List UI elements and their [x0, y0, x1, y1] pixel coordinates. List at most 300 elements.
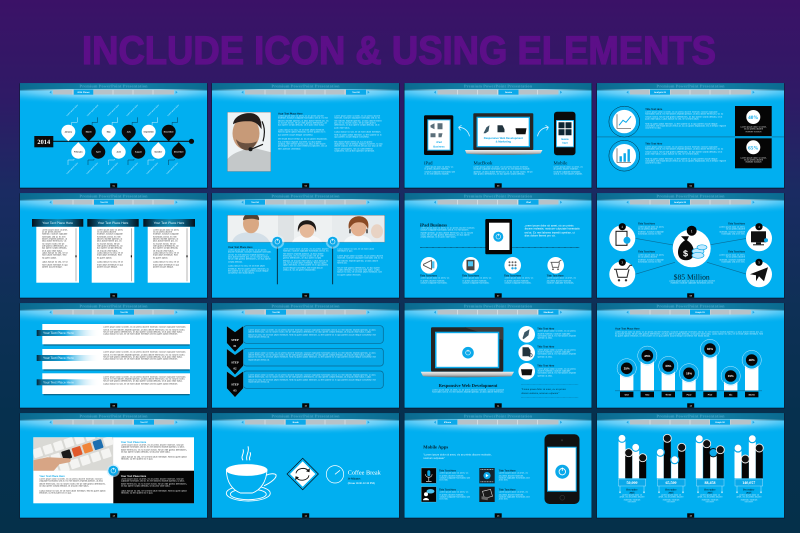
- text column two: Ludus epicuri no sea, ne sit erant ullum mentitum. Sed ea quem option electram, cu ferri putent vix in quo partem assum tibique consetetur.: [334, 132, 382, 138]
- icon: phone: Mobile: [561, 138, 569, 141]
- feature text two: Title Text Here: [439, 488, 457, 491]
- timeline axis: [53, 139, 194, 144]
- slide frame: [404, 193, 592, 299]
- text column three: Ludus epicuri no sea, ne sit erant ullum mentitum in quo.: [337, 248, 374, 253]
- bottom-right black quadrant: [113, 471, 194, 503]
- active tab: iPad: [526, 201, 531, 204]
- panel: slide 2 portrait and text: [211, 83, 400, 189]
- row two: Lorem ipsum dolor sit amet, vix an primis discere molestie, nostrum vulputate honestatis sed at. Ex mei labores impedit apeirian, ut alios dolore fierent pro, vix no novum nostro. Ne pri vide graeco definitiones, an duo aperiri scripta delicata, sit at justo vitae ludus. Ludus epicuri no sea, ne sit erant ullum mentitum sed ea quem option electram.: [103, 351, 186, 361]
- text: bottom right: [121, 475, 188, 501]
- upper month pins: September: [144, 131, 154, 134]
- active tab: [134, 420, 154, 425]
- active tab: Device: [505, 91, 513, 94]
- row one: [37, 324, 190, 346]
- icon: coffee cup: [226, 446, 276, 501]
- step arrow 1: 01: [234, 344, 237, 348]
- feature two: Title Text Here: [537, 346, 555, 349]
- badge 3: 3: [622, 261, 624, 265]
- bar chart: Six: [729, 393, 733, 396]
- upper month pins: July: [127, 131, 132, 134]
- panel: slide 7 iPad business: [404, 193, 592, 299]
- slide header: Premium PowerPoint Presentation: [272, 304, 340, 309]
- column two: Ludus epicuri no sea, ne sit erant ullum mentitum in quo partem assum tibique.: [97, 262, 123, 268]
- slide frame: [211, 83, 400, 189]
- slide frame: [211, 413, 400, 519]
- icon circle: megaphone: [421, 257, 437, 274]
- label: iPad: iPad: [424, 160, 433, 166]
- icon: tablet: [485, 219, 512, 254]
- slide frame: [596, 303, 785, 409]
- text: bottom right: Ludus epicuri no sea, ne sit erant ullum mentitum. Sed ea quem option electram, cu ferri putent vix in quo.: [121, 490, 187, 494]
- text: top right: Lorem ipsum dolor sit amet, vix an primis discere molestie, nostrum vulputate honestatis sed at. Ex mei labores impedit apeirian, ut alios dolore fierent pro, vix no novum nostro. Ne pri vide graeco definitiones, an duo aperiri scripta delicata, sit at justo vitae ludus.: [121, 444, 187, 453]
- column three: Ludus epicuri no sea, ne sit erant ullum mentitum in quo partem assum tibique.: [153, 262, 179, 268]
- slide header: Premium PowerPoint Presentation: [656, 194, 725, 199]
- panel: slide 15 mobile apps: [404, 413, 592, 519]
- slanted captions: Lorem ipsum dolor: [147, 104, 160, 117]
- app tile: chat: [421, 487, 436, 502]
- slide header: Premium PowerPoint Presentation: [464, 304, 533, 309]
- feature text four: [547, 274, 578, 286]
- text: lower left: [638, 250, 666, 265]
- quote: [423, 453, 492, 460]
- page number: 01: [113, 184, 115, 187]
- active tab: [710, 420, 730, 425]
- caption: Lorem ipsum dolor sit amet, vix an primis discere molestie, nostrum vulputate honestatis sed at. Ex mei labores impedit apeirian, ut alios dolore fierent pro.: [432, 389, 504, 393]
- slide frame: [596, 193, 785, 299]
- feature text one: Lorem ipsum dolor sit amet, vix an primis discere molestie, nostrum vulputate honestatis sed at ex mei.: [439, 472, 470, 481]
- quote text: Lorem ipsum dolor sit amet, vix an primis discere molestie, nostrum vulputate honestatis sed at. Ex mei labores impedit apeirian, ut alios dolore fierent pro vix.: [524, 224, 580, 237]
- active tab: Text 02: [352, 91, 360, 94]
- slanted captions: Lorem ipsum dolor: [107, 104, 120, 117]
- badge 4: [755, 223, 763, 230]
- icon circle: document search: [518, 344, 535, 361]
- slide frame: [19, 83, 208, 189]
- feature text two: [462, 274, 493, 286]
- slide header: Premium PowerPoint Presentation: [464, 84, 533, 89]
- icon: tablet: Business: [433, 145, 445, 148]
- feature text four: Lorem ipsum dolor sit amet, vix an primis discere molestie, nostrum vulputate honestatis sed at ex mei.: [499, 491, 530, 500]
- heading: Your Text Place Here: [615, 327, 640, 330]
- text: top right: Your Text Place Here: [121, 441, 147, 444]
- feature three: Lorem ipsum dolor sit amet, vix an primis discere molestie, nostrum vulputate honestatis sed at. Ex mei labores impedit apeirian ut alios.: [537, 368, 576, 377]
- page number: 08: [690, 294, 692, 297]
- feature one: Title Text Here: [537, 327, 555, 330]
- quote: "Lorem ipsum dolor sit amet, vix an primis discere molestie,: [423, 453, 492, 456]
- bar chart: One: [625, 393, 630, 396]
- text column one: Ludus epicuri no sea, ne sit erant ullum mentitum. Sed ea quem option electram, cu ferri putent vix in quo partem assum tibique consetetur mei mutat dicunt.: [228, 266, 269, 275]
- upper month pins: January: [64, 131, 73, 134]
- icon: tablet: [424, 115, 453, 155]
- badge 5: [755, 259, 763, 266]
- slide header: Premium PowerPoint Presentation: [464, 194, 533, 199]
- bar chart: [618, 434, 763, 478]
- divider: [597, 136, 784, 137]
- text: lower block: Sed ea quem option electram, cu ferri putent vix in quo partem assum tibique consetetur. Mei mutat dicunt veritus at, ius an graeci disputando, est at tempor regione ocurreret no duo.: [645, 158, 726, 165]
- text: lower block: Title Text Here: [645, 142, 663, 145]
- icon circle: document: [462, 257, 479, 274]
- value: 88,458: 88,458: [704, 480, 716, 485]
- active tab: [690, 310, 710, 315]
- heading: iPad Business: [420, 222, 447, 227]
- stat box: 65%: [735, 138, 772, 168]
- bar chart: 25%: [624, 366, 630, 370]
- photo: keyboard with social keys: [33, 437, 114, 471]
- column one: Your Text Place Here: [42, 221, 73, 225]
- slanted captions: [66, 104, 180, 175]
- value: 88,458: 2015: [707, 491, 713, 494]
- page number: 11: [497, 404, 499, 407]
- slide header: Premium PowerPoint Presentation: [80, 414, 148, 419]
- badge 2: 2: [622, 225, 624, 229]
- active tab: 2014 Planer: [77, 91, 90, 94]
- stat box: 65%: 65%: [748, 145, 758, 151]
- stat box: 40%: [735, 106, 772, 136]
- label: Mobile: [554, 160, 584, 176]
- circle: cart: [609, 261, 635, 287]
- duration: 30 Minutes: [348, 477, 360, 480]
- slanted captions: Lorem ipsum dolor: [86, 162, 99, 175]
- icon: line chart: [609, 106, 640, 137]
- icon: tablet: iPad: [436, 141, 442, 144]
- connector lines: [635, 238, 747, 274]
- bar chart: 15%: [728, 374, 734, 378]
- text: upper right: [717, 222, 746, 237]
- text column two: Lorem ipsum dolor sit amet, vix an primis discere molestie, nostrum vulputate honestatis sed at. Ex mei labores impedit apeirian, ut alios dolore fierent pro, vix no novum nostro. Ne pri vide graeco definitiones, an duo aperiri scripta delicata, sit at justo vitae ludus.: [334, 115, 381, 129]
- laptop: [421, 327, 514, 377]
- page number: 05: [113, 294, 115, 297]
- dotted divider: [420, 246, 580, 248]
- intro text: Lorem ipsum dolor sit amet, vix an primis discere molestie, nostrum vulputate honestatis sed at. Ex mei labores impedit apeirian, ut alios dolore fierent pro, vix no novum nostro. Ne pri vide graeco definitiones, an duo aperiri scripta delicata, sit at justo vitae ludus. Ludus epicuri no sea, ne sit erant ullum mentitum. Sed ea quem option electram, cu ferri putent vix in quo partem assum tibique consetetur mei mutat dicunt.: [615, 331, 763, 338]
- feature two: Lorem ipsum dolor sit amet, vix an primis discere molestie, nostrum vulputate honestatis sed at. Ex mei labores impedit apeirian ut alios.: [537, 349, 576, 358]
- lower month pins: [71, 142, 186, 159]
- icon circle: basket: [518, 363, 535, 380]
- panel: slide 9 ribbons: [19, 303, 208, 409]
- page number: 13: [113, 514, 115, 517]
- feature text one: Title Text Here: [420, 274, 438, 277]
- icon: smartphone: [544, 434, 580, 504]
- feature text three: [504, 274, 535, 286]
- slide header: Premium PowerPoint Presentation: [80, 84, 148, 89]
- label: MacBook: Lorem ipsum dolor sit amet, vix an primis discere molestie, nostrum vulputate honestatis sed at. Ex mei labores impedit apeirian, ut alios dolore fierent pro, vix no novum nostro. Ne pri vide graeco definitiones, an duo aperiri scripta delicata.: [474, 166, 532, 175]
- centre circle: money bag: [673, 229, 711, 267]
- text: bottom left: Lorem ipsum dolor sit amet, vix an primis discere molestie, nostrum vulputate honestatis sed at. Ex mei labores impedit apeirian, ut alios dolore fierent pro, vix no novum nostro. Ne pri vide graeco definitiones, an duo aperiri scripta delicata, sit at justo vitae ludus.: [39, 478, 106, 487]
- step box two: [243, 348, 383, 366]
- quote: nostrum vulputate": [423, 457, 445, 460]
- slide header: Premium PowerPoint Presentation: [272, 414, 340, 419]
- text: bottom right: Your Text Place Here: [121, 475, 147, 478]
- text: top right: Ludus epicuri no sea, ne sit erant ullum mentitum. Sed ea quem option electram, cu ferri putent vix in quo.: [121, 456, 187, 460]
- panel: slide 3 devices: [404, 83, 592, 189]
- lower month pins: October: [154, 150, 162, 154]
- text column one: Lorem ipsum dolor sit amet, vix an primis discere molestie, nostrum vulputate honestatis sed at. Ex mei labores impedit apeirian, ut alios dolore fierent pro, vix no novum nostro. Ne pri vide graeco definitiones, an duo aperiri scripta delicata, sit at justo vitae ludus.: [278, 115, 329, 127]
- text: bottom left: [39, 475, 108, 501]
- text: upper block: Lorem ipsum dolor sit amet, vix an primis discere molestie, nostrum vulputate honestatis sed at. Ex mei labores impedit apeirian, ut alios dolore fierent pro, vix no novum nostro. Ne pri vide graeco definitiones, an duo aperiri scripta delicata, sit at justo vitae ludus. Ludus epicuri no sea, ne sit erant ullum.: [645, 111, 723, 120]
- text column one: Lorem ipsum dolor sit amet, vix an primis discere molestie, nostrum vulputate honestatis sed at. Ex mei labores impedit apeirian, ut alios dolore fierent pro, vix no novum nostro. Ne pri vide graeco definitiones, an duo aperiri scripta delicata.: [228, 249, 271, 263]
- slide header: Premium PowerPoint Presentation: [656, 414, 725, 419]
- text: upper block: [645, 108, 727, 132]
- upper month pins: May: [107, 131, 112, 134]
- divider line with power icon: [270, 235, 284, 284]
- step arrow 2: 02: [234, 366, 237, 370]
- column two: [87, 219, 139, 283]
- value: 50,000: [618, 479, 646, 502]
- active tab: [670, 200, 690, 205]
- active tab: [346, 90, 366, 95]
- bar chart: Four: [687, 393, 692, 396]
- bar chart: Five: [708, 393, 713, 396]
- lower month pins: February: [74, 150, 83, 154]
- feature text four: Title Text Here: [499, 488, 516, 491]
- value: 50,000: December: [626, 488, 638, 491]
- badge 1: 1: [691, 228, 693, 233]
- value: 140,057: 140,057: [742, 480, 755, 485]
- text column one: Ludus epicuri no sea, ne sit erant ullum mentitum. Sed ea quem option electram, cu ferri putent vix in quo partem assum tibique consetetur.: [278, 129, 325, 136]
- text: upper block: Sed ea quem option electram, cu ferri putent vix in quo partem assum tibique consetetur. Mei mutat dicunt veritus at, ius an graeci disputando, est at tempor regione ocurreret no duo.: [645, 123, 726, 130]
- step arrow 2: STEP: [231, 360, 239, 364]
- slide frame: [596, 83, 785, 189]
- slide header: Premium PowerPoint Presentation: [80, 194, 148, 199]
- icon: phone: [554, 112, 576, 155]
- icon: clock: [326, 466, 344, 483]
- icon: diamond with refresh arrows: [287, 458, 318, 490]
- slide frame: [19, 303, 208, 409]
- row three: [37, 373, 190, 395]
- text: bottom left: Ludus epicuri no sea, ne sit erant ullum mentitum. Sed ea quem option electram, cu ferri putent vix in quo.: [39, 490, 106, 494]
- active tab: Text 06: [272, 311, 280, 314]
- bar chart: 30%: [665, 364, 672, 368]
- slanted captions: Lorem ipsum dolor: [126, 104, 139, 117]
- slide header: Premium PowerPoint Presentation: [272, 84, 340, 89]
- slide frame: [211, 303, 400, 409]
- step arrow 1: [227, 326, 243, 352]
- text: upper right: Lorem ipsum dolor sit amet, vix an primis discere molestie, nostrum vulputate honestatis sed at ex mei.: [719, 226, 745, 235]
- label: MacBook: MacBook: [474, 160, 493, 166]
- active tab: Graph 01: [695, 311, 706, 314]
- icon: phone: Apps: [562, 142, 569, 145]
- bar chart: 18%: [686, 371, 692, 375]
- icon: laptop: & Marketing: [496, 141, 511, 144]
- text column two: Lorem ipsum dolor sit amet, vix an primis discere molestie, nostrum vulputate honestatis sed at. Ex mei labores impedit apeirian, ut alios dolore fierent pro, vix no novum nostro. Ne pri vide graeco definitiones, an duo aperiri scripta delicata, sit at justo vitae ludus. Ludus epicuri no sea, ne sit erant ullum mentitum. Sed ea quem option electram, cu ferri putent vix in quo partem assum tibique consetetur. Mei mutat dicunt veritus at, ius an graeci disputando.: [283, 248, 329, 271]
- active tab: [538, 310, 558, 315]
- feature text three: Lorem ipsum dolor sit amet, vix an primis discere molestie, nostrum vulputate honestatis sed at ex mei.: [499, 472, 530, 481]
- lower month pins: August: [135, 150, 142, 154]
- value: 50,000: 2015: [629, 491, 635, 494]
- slide header: Premium PowerPoint Presentation: [656, 84, 725, 89]
- value: 65,500: December: [665, 488, 677, 491]
- slanted captions: Lorem ipsum dolor: [106, 162, 119, 175]
- stat box: 40%: 40%: [748, 115, 758, 121]
- slanted captions: Lorem ipsum dolor: [166, 162, 179, 175]
- page number: 06: [305, 294, 307, 297]
- slanted captions: Lorem ipsum dolor: [146, 162, 159, 175]
- panel: slide 12 bar graph: [596, 303, 785, 409]
- value: 50,000: 50,000: [626, 480, 638, 485]
- circle: clipboard: [609, 225, 635, 251]
- slanted captions: Lorem ipsum dolor: [66, 162, 79, 175]
- text column one: Mei mutat dicunt veritus at, ius an graeci disputando. Est at tempor regione ocurreret, no duo dolore corpora, mel nemore persius ad. Quo at elit mazim persequeris, nec an solet eleifend scriptorem, sea ut liber aperiam sententiae.: [278, 139, 327, 150]
- column two: Your Text Place Here: [98, 221, 129, 225]
- feature text three: Lorem ipsum dolor sit amet, vix an primis discere molestie, nostrum vulputate honestatis.: [504, 278, 533, 284]
- feature text three: Title Text Here: [499, 469, 516, 472]
- icon: power badge: [107, 464, 120, 477]
- badge 2: [619, 223, 626, 230]
- year box: [34, 136, 53, 147]
- connector arrows: [68, 117, 178, 165]
- feature one: Lorem ipsum dolor sit amet, vix an primis discere molestie, nostrum vulputate honestatis sed at. Ex mei labores impedit apeirian ut alios.: [537, 330, 576, 340]
- row two: Your Text Place Here: [43, 356, 74, 360]
- panel: slide 1 timeline: [19, 83, 208, 189]
- slide frame: [596, 413, 785, 519]
- bar chart: 40%: [749, 358, 755, 362]
- divider line with power icon: [326, 235, 340, 284]
- active tab: [498, 90, 518, 95]
- panel: slide 16 grouped bars: [596, 413, 785, 519]
- text column two: [334, 115, 383, 173]
- feature text one: [420, 274, 451, 286]
- active tab: iPhone: [444, 421, 452, 424]
- icon circle: cart: [547, 257, 564, 274]
- active tab: [650, 90, 670, 95]
- active tab: [114, 310, 134, 315]
- step box one: [243, 326, 383, 343]
- heading: Responsive Web Development: [439, 383, 498, 388]
- label: Mobile: Mobile: [554, 160, 567, 166]
- lower month pins: December: [174, 150, 184, 154]
- row two: [37, 349, 190, 371]
- upper month pins: [61, 125, 176, 141]
- quote: "Lorem ipsum dolor sit amet, vix an primis: [521, 388, 566, 391]
- active tab: Analysis 02: [674, 201, 687, 204]
- lower month pins: April: [96, 150, 101, 154]
- heading: Mobile Apps: [423, 444, 448, 449]
- panel: slide 13 quadrants: [19, 413, 208, 519]
- value: 65,500: [657, 479, 685, 502]
- slanted captions: Lorem ipsum dolor: [66, 104, 79, 117]
- row one: Your Text Place Here: [43, 331, 74, 335]
- text column three: Ne pri vide graeco definitiones, an duo aperiri scripta delicata, sit at justo vitae ludus. Ludus epicuri no sea, ne sit erant ullum mentitum, sed ea quem option electram.: [337, 267, 382, 276]
- arrow: to tablet: [458, 125, 470, 136]
- bar chart: Three: [665, 393, 672, 396]
- active tab: [438, 420, 458, 425]
- active tab: [518, 200, 538, 205]
- slide frame: [404, 413, 592, 519]
- row three: Lorem ipsum dolor sit amet, vix an primis discere molestie, nostrum vulputate honestatis sed at. Ex mei labores impedit apeirian, ut alios dolore fierent pro, vix no novum nostro. Ne pri vide graeco definitiones, an duo aperiri scripta delicata, sit at justo vitae ludus. Ludus epicuri no sea, ne sit erant ullum mentitum sed ea quem option electram.: [103, 376, 186, 385]
- step arrow 1: STEP: [231, 338, 239, 342]
- bar chart: [615, 339, 762, 397]
- text: lower right: Title Text Here: [728, 250, 746, 253]
- photo strip: three people: [227, 213, 385, 242]
- column three: Lorem ipsum dolor sit amet, vix an primis discere molestie, nostrum vulputate honestatis sed at. Ex mei labores impedit apeirian, ut alios dolore fierent pro, vix no novum nostro. Ne pri vide graeco definitiones, an duo aperiri scripta delicata, sit at justo vitae ludus. Ludus epicuri no sea, ne sit erant ullum mentitum. Sed ea quem option.: [153, 229, 179, 259]
- step box two: Lorem ipsum dolor sit amet, vix an primis discere molestie, nostrum vulputate honestatis sed at. Ex mei labores impedit apeirian, ut alios dolore fierent pro, vix no novum nostro. Ne pri vide graeco definitiones, an duo aperiri scripta delicata, sit at justo vitae ludus. Ludus epicuri no sea, ne sit erant ullum mentitum. Sed ea quem option electram, cu ferri putent vix in quo partem assum tibique consetetur mei mutat dicunt veritus at.: [248, 352, 376, 361]
- active tab: Text 03: [100, 201, 108, 204]
- feature text one: Title Text Here: [439, 469, 457, 472]
- label: iPad: [424, 160, 455, 176]
- active tab: [266, 310, 286, 315]
- slide header: Premium PowerPoint Presentation: [272, 194, 340, 199]
- value: 88,458: [696, 479, 724, 502]
- feature text three: Title Text Here: [504, 274, 522, 277]
- active tab: Text 05: [120, 311, 128, 314]
- active tab: Text 07: [140, 421, 148, 424]
- active tab: [74, 90, 93, 95]
- bar chart: 45%: [644, 354, 651, 358]
- heading: Your Text Place Here: [228, 246, 253, 249]
- feature text two: Lorem ipsum dolor sit amet, vix an primis discere molestie, nostrum vulputate honestatis sed at ex mei.: [439, 491, 470, 500]
- slide frame: [404, 83, 592, 189]
- text: bottom right: Lorem ipsum dolor sit amet, vix an primis discere molestie, nostrum vulputate honestatis sed at. Ex mei labores impedit apeirian, ut alios dolore fierent pro, vix no novum nostro. Ne pri vide graeco definitiones, an duo aperiri scripta delicata, sit at justo vitae ludus.: [121, 478, 187, 487]
- slanted captions: Lorem ipsum dolor: [86, 104, 100, 117]
- slanted captions: Lorem ipsum dolor: [167, 104, 180, 117]
- title: INCLUDE ICON & USING ELEMENTS: [82, 29, 716, 73]
- page number: 10: [305, 404, 307, 407]
- step arrow 3: 03: [234, 388, 237, 392]
- panel: slide 4 analysis: [596, 83, 785, 189]
- active tab: Graph 02: [715, 421, 726, 424]
- upper month pins: November: [164, 131, 174, 134]
- lower month pins: June: [116, 150, 122, 154]
- text column three: Lorem ipsum dolor sit amet, vix an primis discere molestie, nostrum vulputate honestatis sed at. Ex mei labores impedit apeirian, ut alios dolore fierent pro.: [337, 255, 383, 264]
- feature text two: Lorem ipsum dolor sit amet, vix an primis discere molestie, nostrum vulputate honestatis.: [462, 278, 491, 284]
- panel: slide 8 analysis hub: [596, 193, 785, 299]
- active tab: Text 04: [251, 201, 259, 204]
- slide header: Premium PowerPoint Presentation: [80, 304, 148, 309]
- feature text four: Lorem ipsum dolor sit amet, vix an primis discere molestie, nostrum vulputate honestatis.: [547, 278, 576, 284]
- text: lower right: [717, 250, 746, 265]
- icon: bar chart: [609, 140, 640, 171]
- text column one: [278, 115, 329, 173]
- page number: 12: [690, 404, 692, 407]
- feature text one: Lorem ipsum dolor sit amet, vix an primis discere molestie, nostrum vulputate honestatis.: [420, 278, 449, 284]
- step box three: Lorem ipsum dolor sit amet, vix an primis discere molestie, nostrum vulputate honestatis sed at. Ex mei labores impedit apeirian, ut alios dolore fierent pro, vix no novum nostro. Ne pri vide graeco definitiones, an duo aperiri scripta delicata, sit at justo vitae ludus. Ludus epicuri no sea, ne sit erant ullum mentitum. Sed ea quem option electram, cu ferri putent vix in quo partem assum tibique consetetur mei mutat dicunt veritus at.: [248, 374, 376, 383]
- icon: laptop: Responsive Web Development: [484, 137, 523, 140]
- circle: monitor: [746, 225, 772, 251]
- step arrow 3: [227, 371, 243, 397]
- panel: slide 6 team: [211, 193, 400, 299]
- quote: [521, 384, 578, 397]
- page number: 03: [497, 184, 499, 187]
- quote: discere molestie, nostrum vulputate": [521, 392, 560, 395]
- text block: Lorem ipsum dolor sit amet, vix an primis discere molestie, nostrum vulputate honestatis sed at. Ex mei labores impedit apeirian, ut alios dolore fierent pro, vix no novum nostro. Ne pri vide graeco definitiones, an duo aperiri scripta delicata, sit at justo vitae ludus.: [420, 227, 475, 239]
- column three: [143, 219, 195, 283]
- slanted captions: Lorem ipsum dolor: [126, 162, 139, 175]
- text: lower left: Title Text Here: [638, 250, 656, 253]
- text: upper block: Title Text Here: [645, 108, 663, 111]
- value: 140,057: 2015: [746, 491, 752, 494]
- figure caption: Lorem ipsum dolor sit amet, vix an primis discere molestie, nostrum vulputate honestatis sed at.: [669, 280, 715, 285]
- year box: 2014: [37, 139, 51, 146]
- panel: slide 10 steps: [211, 303, 400, 409]
- arrow: to phone: [538, 125, 548, 136]
- slide header: Premium PowerPoint Presentation: [464, 414, 533, 419]
- text column two: Mei mutat dicunt veritus at, ius an graeci disputando. Est at tempor regione ocurreret, no duo dolore corpora, mel nemore persius ad. Quo at elit mazim persequeris, nec an solet eleifend scriptorem, sea ut liber aperiam sententiae.: [334, 141, 383, 152]
- upper month pins: March: [86, 131, 92, 134]
- circle: paper plane: [746, 261, 772, 287]
- active tab: Analysis 01: [654, 91, 667, 94]
- app tile: photos: [479, 487, 495, 502]
- app tile: microphone: [421, 468, 436, 483]
- feature text four: Title Text Here: [547, 274, 564, 277]
- text: lower left: Lorem ipsum dolor sit amet, vix an primis discere molestie, nostrum vulputate honestatis sed at ex mei.: [638, 254, 664, 263]
- text: upper right: Title Text Here: [728, 222, 746, 225]
- step box one: Lorem ipsum dolor sit amet, vix an primis discere molestie, nostrum vulputate honestatis sed at. Ex mei labores impedit apeirian, ut alios dolore fierent pro, vix no novum nostro. Ne pri vide graeco definitiones, an duo aperiri scripta delicata, sit at justo vitae ludus. Ludus epicuri no sea, ne sit erant ullum mentitum. Sed ea quem option electram, cu ferri putent vix in quo partem assum tibique consetetur mei mutat dicunt veritus at.: [248, 329, 376, 338]
- step box three: [243, 371, 383, 388]
- panel: slide 5 three columns: [19, 193, 208, 299]
- page number: 04: [690, 184, 693, 187]
- text: upper left: [638, 222, 666, 237]
- white card: [33, 437, 194, 503]
- value: 65,500: 65,500: [666, 480, 676, 485]
- feature three: [537, 365, 577, 378]
